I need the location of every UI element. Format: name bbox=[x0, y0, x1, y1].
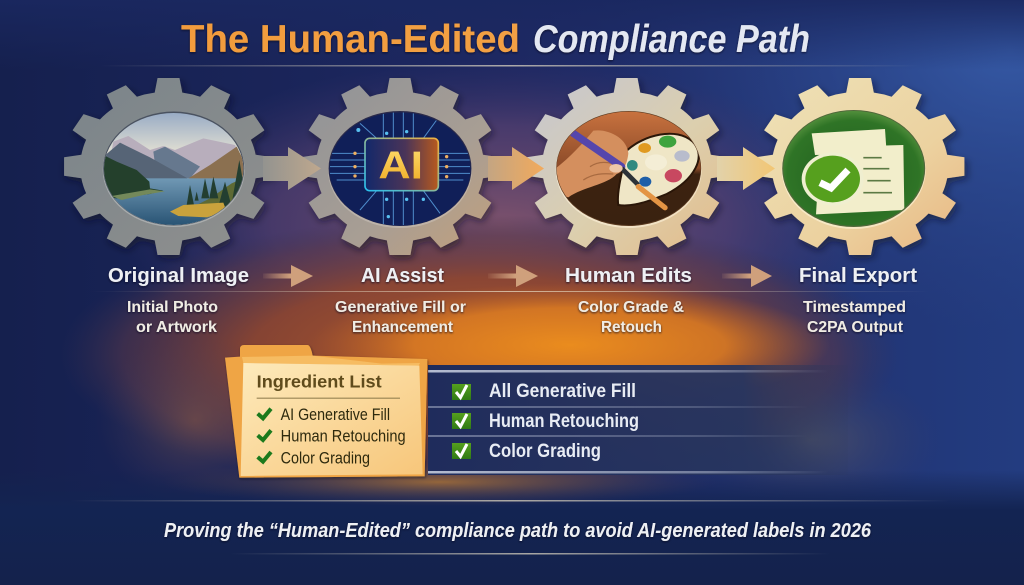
arrow: gear 1 to gear 2 bbox=[263, 147, 321, 190]
small arrow 2 bbox=[488, 265, 538, 287]
folder items bbox=[281, 406, 406, 467]
checkbox 1 bbox=[452, 384, 471, 400]
row label 2: Human Retouching bbox=[489, 411, 639, 432]
folder items: AI Generative Fill bbox=[281, 406, 390, 424]
circuit chip bbox=[327, 110, 473, 227]
step labels: Original Image bbox=[108, 265, 249, 287]
checkbox 2 bbox=[452, 413, 471, 429]
checkbox 3 bbox=[452, 443, 471, 459]
step descriptions: Retouch bbox=[601, 319, 662, 336]
step descriptions bbox=[127, 299, 906, 336]
step descriptions: or Artwork bbox=[136, 319, 217, 336]
folder items: Human Retouching bbox=[281, 428, 406, 446]
title bbox=[181, 18, 810, 61]
folder check marks bbox=[258, 409, 271, 462]
step labels: Human Edits bbox=[565, 265, 692, 287]
step descriptions: Timestamped bbox=[803, 299, 906, 316]
step descriptions: Enhancement bbox=[352, 319, 454, 336]
gear 3: human edits bbox=[527, 78, 727, 255]
certified document bbox=[780, 108, 927, 228]
gear 2: AI assist bbox=[301, 78, 499, 255]
row label 3: Color Grading bbox=[489, 441, 601, 462]
step descriptions: Generative Fill or bbox=[335, 299, 466, 316]
footer statement: Proving the “Human-Edited” compliance path to avoid AI-generated labels in 2026 bbox=[164, 520, 872, 542]
title: The Human-Edited bbox=[181, 18, 520, 61]
step descriptions: Color Grade & bbox=[578, 299, 684, 316]
AI label: AI bbox=[378, 143, 423, 187]
arrow: gear 3 to gear 4 bbox=[717, 147, 775, 190]
landscape photo bbox=[100, 110, 247, 228]
folder heading: Ingredient List bbox=[257, 372, 382, 392]
arrow: gear 2 to gear 3 bbox=[488, 147, 544, 190]
folder items: Color Grading bbox=[281, 449, 370, 467]
step labels bbox=[108, 265, 917, 287]
step descriptions: Initial Photo bbox=[127, 299, 218, 316]
small arrow 3 bbox=[722, 265, 772, 287]
checklist panel bbox=[428, 365, 848, 475]
folder: ingredient list bbox=[225, 345, 427, 478]
check badge bbox=[802, 155, 820, 202]
row label 1: All Generative Fill bbox=[489, 381, 636, 402]
step labels: AI Assist bbox=[361, 265, 444, 287]
gear 4: final export bbox=[756, 78, 964, 255]
step descriptions: C2PA Output bbox=[807, 319, 904, 336]
title: Compliance Path bbox=[533, 18, 810, 61]
gear 1: original image bbox=[64, 78, 273, 255]
step labels: Final Export bbox=[799, 265, 917, 287]
small arrow 1 bbox=[263, 265, 313, 287]
hand and palette bbox=[553, 108, 703, 228]
